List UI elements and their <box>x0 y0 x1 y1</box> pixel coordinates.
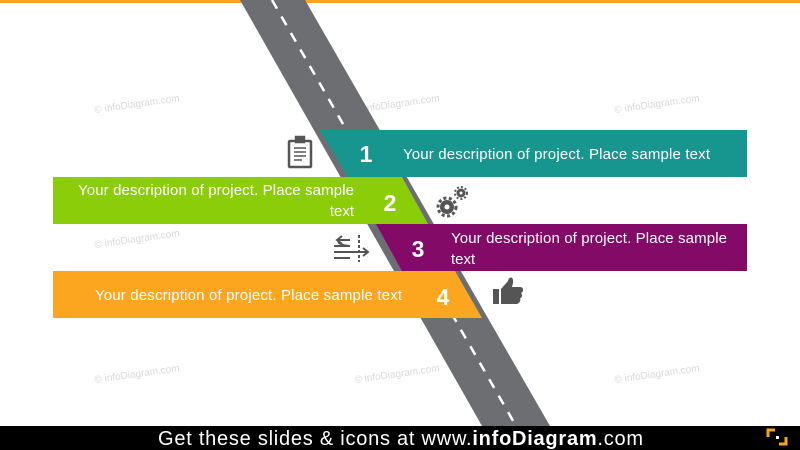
watermarks: © infoDiagram.com <box>614 363 700 386</box>
top accent line <box>0 0 800 3</box>
icon: thumbs up <box>493 277 523 304</box>
banner 2: text <box>330 203 355 220</box>
banner 3: Your description of project. Place sample <box>451 230 727 247</box>
banner 4: Your description of project. Place sample text <box>95 287 403 304</box>
banner 2: 2 <box>384 190 396 216</box>
watermarks: © infoDiagram.com <box>614 93 700 116</box>
watermarks: © infoDiagram.com <box>94 363 180 386</box>
banner 3: 3 <box>412 236 424 262</box>
footer bar: Get these slides & icons at www.infoDiagram.com <box>158 428 643 450</box>
banner 2: Your description of project. Place sample <box>78 182 354 199</box>
banner 2 <box>53 177 428 224</box>
banner 1: Your description of project. Place sample text <box>403 146 711 163</box>
watermarks: © infoDiagram.com <box>354 363 440 386</box>
icon: gears <box>438 187 467 216</box>
watermarks: © infoDiagram.com <box>94 93 180 116</box>
footer bar <box>0 426 800 450</box>
watermarks: © infoDiagram.com <box>94 228 180 251</box>
road <box>240 0 550 426</box>
banner 3 <box>376 224 747 271</box>
footer logo <box>768 430 786 444</box>
banner 3: text <box>451 251 476 268</box>
watermarks: © infoDiagram.com <box>354 93 440 116</box>
banner 4 <box>53 271 482 318</box>
icon: clipboard <box>289 137 311 167</box>
banner 1: 1 <box>360 141 373 167</box>
banner 4: 4 <box>437 284 450 310</box>
watermarks <box>94 93 700 386</box>
icon: direction arrows <box>334 235 368 262</box>
banner 1 <box>320 130 747 177</box>
